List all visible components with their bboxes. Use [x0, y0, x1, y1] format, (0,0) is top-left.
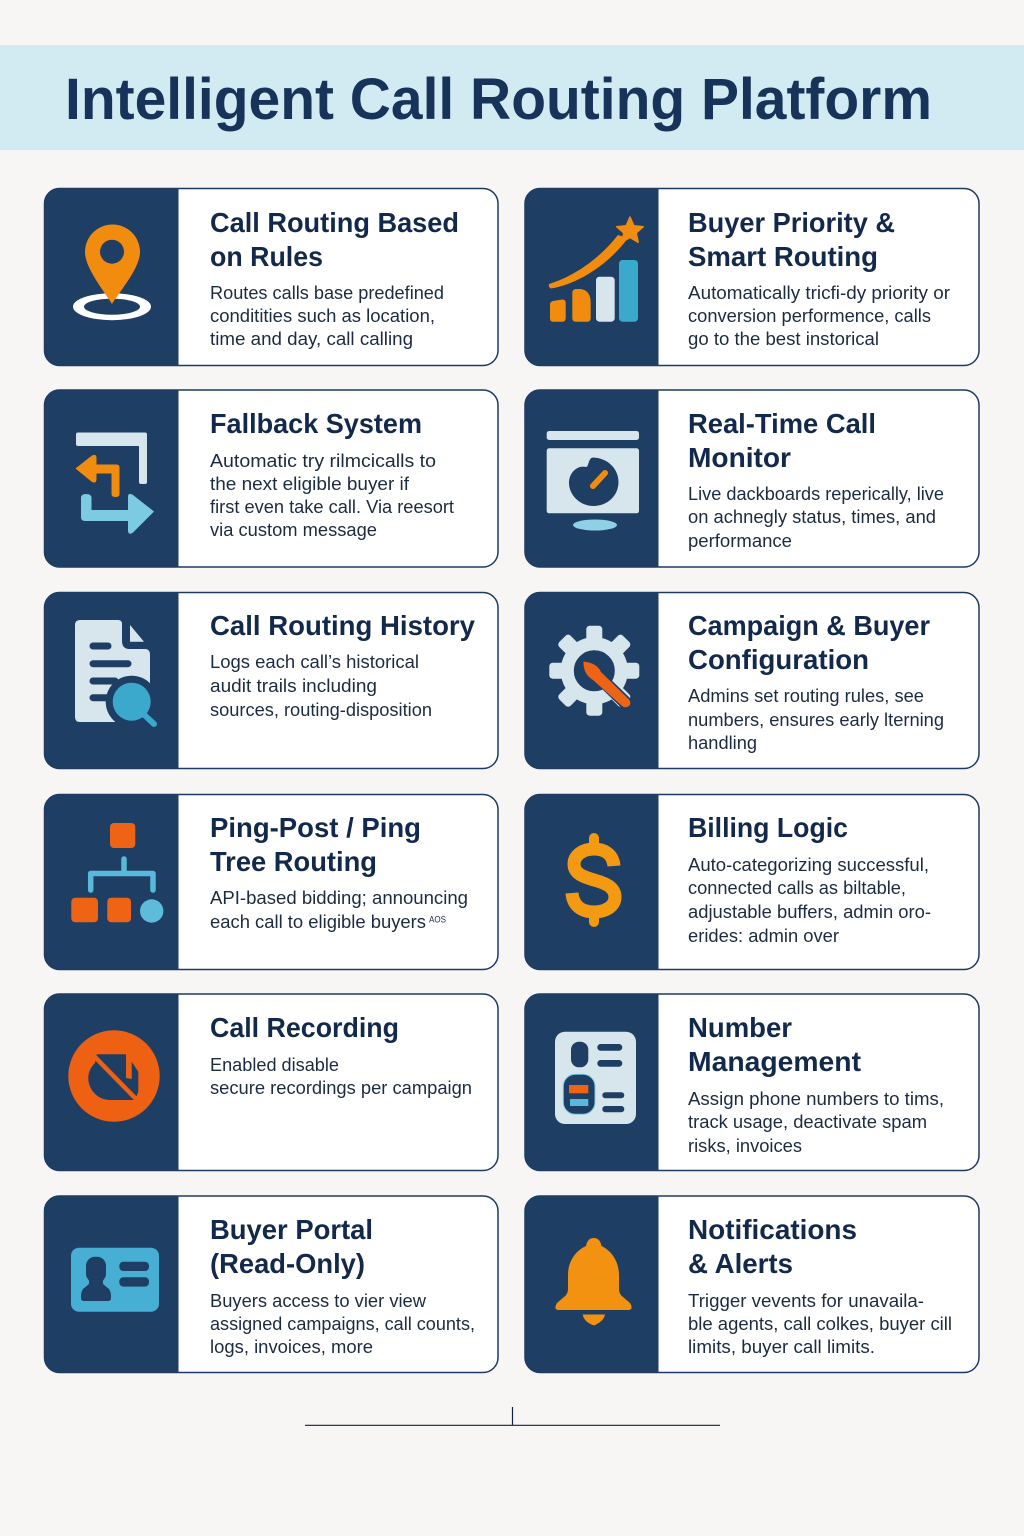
description [210, 1055, 472, 1098]
heading: Call Routing Based [210, 207, 459, 238]
description: handling [688, 733, 757, 753]
description [210, 888, 468, 932]
description: Enabled disable [210, 1055, 339, 1075]
description: API-based bidding; announcing [210, 888, 468, 908]
description [688, 686, 944, 753]
panel: Buyer Portal (Read-Only) [44, 1196, 498, 1372]
description [210, 1291, 475, 1357]
description: conditities such as location, [210, 306, 435, 326]
description: Live dackboards reperically, live [688, 484, 944, 504]
heading: Tree Routing [210, 846, 377, 877]
icon: monitor with dial [547, 431, 639, 530]
description: Automatically tricfi-dy priority or [688, 283, 950, 303]
panel: Call Routing History [44, 592, 498, 768]
description: time and day, call calling [210, 329, 413, 349]
panel: Ping-Post / Ping Tree Routing [44, 794, 498, 970]
description: ble agents, call colkes, buyer cill [688, 1314, 952, 1334]
heading: Ping-Post / Ping [210, 812, 421, 843]
heading: Fallback System [210, 408, 422, 439]
description: risks, invoices [688, 1136, 802, 1156]
icon: document with magnifier [75, 620, 158, 728]
description: Admins set routing rules, see [688, 686, 924, 706]
panel: Real-Time Call Monitor [525, 390, 979, 567]
description: track usage, deactivate spam [688, 1112, 927, 1132]
description [688, 1291, 952, 1357]
heading [210, 812, 421, 877]
icon: number card [555, 1032, 636, 1124]
description: AOS [429, 914, 446, 924]
description: assigned campaigns, call counts, [210, 1314, 475, 1334]
heading: Monitor [688, 442, 791, 473]
heading [688, 207, 895, 272]
heading: Notifications [688, 1214, 857, 1245]
icon: location pin [73, 224, 151, 320]
description [210, 652, 432, 720]
icon: buyer ID card [71, 1248, 159, 1312]
heading: on Rules [210, 241, 323, 272]
heading: & Alerts [688, 1248, 793, 1279]
description [688, 1089, 944, 1156]
description: the next eligible buyer if [210, 474, 410, 494]
description: logs, invoices, more [210, 1337, 373, 1357]
description: each call to eligible buyers [210, 912, 426, 932]
heading [688, 610, 930, 675]
panel: Call Routing Based on Rules [44, 188, 498, 366]
description: on achnegly status, times, and [688, 507, 936, 527]
title banner [0, 45, 1024, 150]
description: Auto-categorizing successful, [688, 855, 929, 875]
panel: Billing Logic [525, 794, 979, 970]
panel: Notifications & Alerts [525, 1196, 979, 1372]
description: erides: admin over [688, 926, 839, 946]
description: Trigger vevents for unavaila- [688, 1291, 924, 1311]
icon: rising bar chart with star [549, 217, 643, 322]
description: audit trails including [210, 676, 377, 696]
heading: Configuration [688, 644, 869, 675]
title: Intelligent Call Routing Platform [65, 67, 932, 132]
description: numbers, ensures early lterning [688, 710, 944, 730]
icon: dollar sign [572, 838, 615, 922]
icon: ping tree [71, 823, 163, 923]
heading: Billing Logic [688, 812, 848, 843]
heading [210, 207, 459, 272]
heading: (Read-Only) [210, 1248, 365, 1279]
description: connected calls as biltable, [688, 878, 906, 898]
heading [688, 408, 876, 473]
panel: Fallback System [44, 390, 498, 567]
panel: Buyer Priority & Smart Routing [525, 188, 979, 366]
description: first even take call. Via reesort [210, 497, 454, 517]
description: via custom message [210, 520, 377, 540]
heading: Campaign & Buyer [688, 610, 930, 641]
description: adjustable buffers, admin oro- [688, 902, 931, 922]
description [688, 484, 944, 551]
description: conversion performence, calls [688, 306, 931, 326]
icon: recording disabled [68, 1030, 160, 1122]
heading: Number [688, 1012, 792, 1043]
description [210, 283, 444, 349]
description: sources, routing-disposition [210, 700, 432, 720]
description: Routes calls base predefined [210, 283, 444, 303]
heading: Real-Time Call [688, 408, 876, 439]
description: Logs each call’s historical [210, 652, 419, 672]
heading: Buyer Priority & [688, 207, 895, 238]
description [210, 451, 454, 540]
heading: Management [688, 1046, 861, 1077]
heading [688, 1012, 861, 1077]
icon: fallback arrows [76, 432, 154, 534]
description: limits, buyer call limits. [688, 1337, 875, 1357]
description [688, 855, 931, 946]
panel: Call Recording [44, 994, 498, 1170]
heading: Call Recording [210, 1012, 399, 1043]
description: Buyers access to vier view [210, 1291, 427, 1311]
description: performance [688, 531, 792, 551]
description: secure recordings per campaign [210, 1078, 472, 1098]
heading [210, 1214, 373, 1279]
panel: Number Management [525, 994, 979, 1170]
description: Automatic try rilmcicalls to [210, 451, 436, 471]
panel: Campaign & Buyer Configuration [525, 592, 979, 768]
heading [688, 1214, 857, 1279]
heading: Smart Routing [688, 241, 878, 272]
icon: gear with wrench [549, 626, 639, 716]
heading: Call Routing History [210, 610, 475, 641]
description: go to the best instorical [688, 329, 879, 349]
description: Assign phone numbers to tims, [688, 1089, 944, 1109]
description [688, 283, 950, 349]
icon: bell [555, 1238, 632, 1326]
heading: Buyer Portal [210, 1214, 373, 1245]
